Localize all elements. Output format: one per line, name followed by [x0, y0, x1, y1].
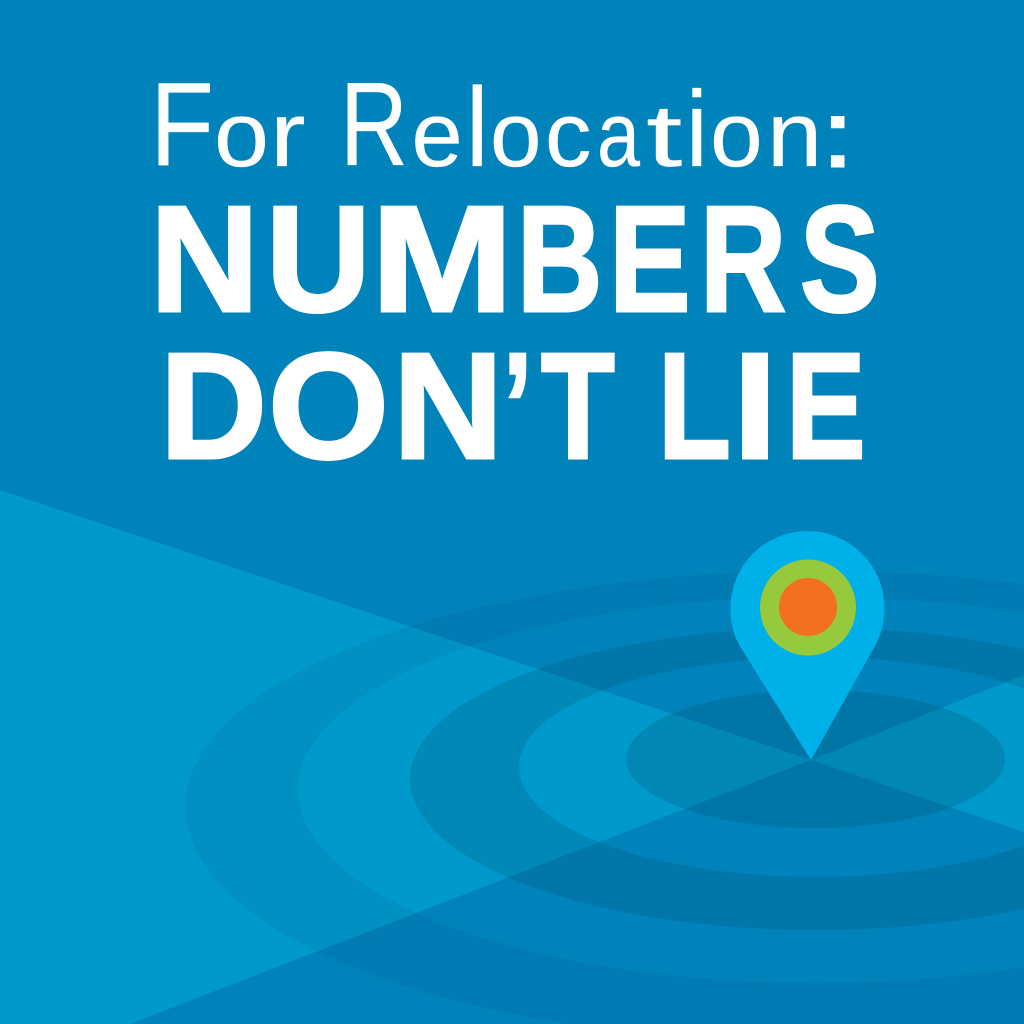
- title line: For Relocation:: i: [686, 68, 708, 189]
- title line: NUMBERS: E: [609, 174, 691, 343]
- title line: For Relocation:: a: [597, 84, 640, 186]
- title line: NUMBERS: N: [150, 174, 259, 343]
- title line: For Relocation:: n: [766, 84, 822, 186]
- title line: For Relocation:: R: [340, 58, 408, 191]
- title line: For Relocation:: [150, 58, 852, 191]
- title line: For Relocation:: o: [710, 84, 763, 186]
- title line: For Relocation:: e: [412, 84, 463, 186]
- title line: DON'T LIE: D: [160, 321, 267, 490]
- title line: DON'T LIE: I: [733, 321, 777, 490]
- right light ground wedge: [811, 675, 1024, 832]
- title line: For Relocation:: l: [466, 65, 489, 190]
- title line: NUMBERS: M: [371, 174, 513, 343]
- left light ground wedge: [0, 490, 811, 1024]
- title line: NUMBERS: S: [800, 174, 879, 343]
- title: [150, 58, 879, 490]
- title line: For Relocation:: r: [270, 84, 306, 186]
- ripple rings: [185, 571, 1024, 1024]
- title line: For Relocation:: o: [214, 84, 269, 186]
- icon: map location pin: [730, 531, 884, 760]
- title line: NUMBERS: [150, 174, 879, 343]
- title line: DON'T LIE: [160, 321, 866, 490]
- title line: DON'T LIE: O: [268, 321, 389, 490]
- title line: DON'T LIE: L: [658, 321, 731, 490]
- title line: NUMBERS: R: [700, 174, 786, 343]
- title line: For Relocation:: F: [150, 58, 214, 191]
- title line: For Relocation:: t: [646, 86, 682, 185]
- title line: For Relocation:: :: [822, 84, 852, 186]
- title line: For Relocation:: c: [545, 84, 592, 186]
- title line: DON'T LIE: N: [393, 321, 503, 490]
- center ripple: [626, 690, 1005, 828]
- outer ripple ring: [185, 571, 1024, 1024]
- title line: NUMBERS: U: [266, 174, 371, 343]
- title line: DON'T LIE: E: [786, 321, 866, 490]
- title line: DON'T LIE: ’: [503, 321, 532, 490]
- title line: DON'T LIE: T: [541, 321, 614, 490]
- middle ripple ring: [410, 628, 1024, 930]
- title line: For Relocation:: o: [490, 84, 542, 186]
- title line: NUMBERS: B: [517, 174, 602, 343]
